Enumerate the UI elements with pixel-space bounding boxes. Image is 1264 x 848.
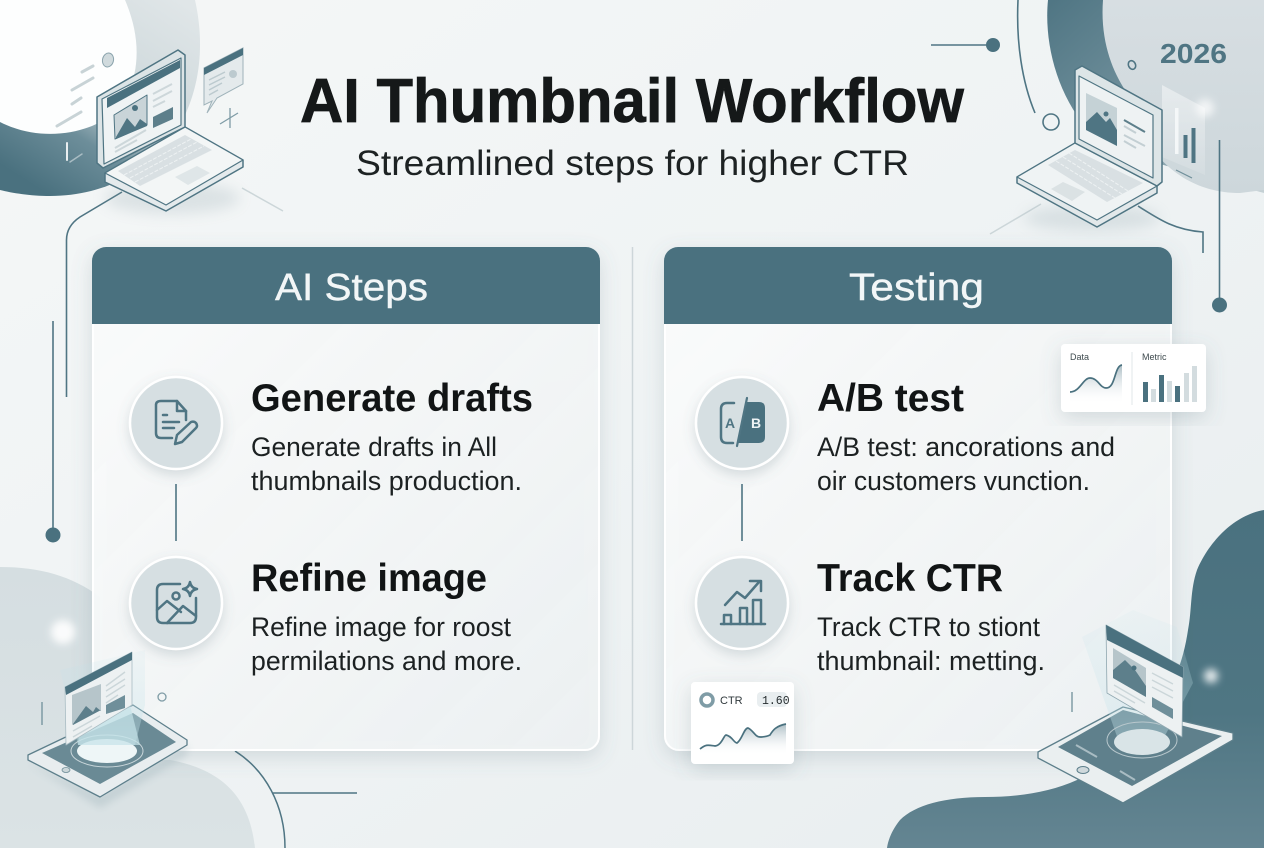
illustration: top-right laptop xyxy=(1017,66,1162,231)
step text: Refine image: permilations and more. xyxy=(251,646,522,676)
decorative shape: top-left crescent xyxy=(0,0,200,196)
panel header: AI Steps xyxy=(92,247,600,324)
panel: Testing xyxy=(664,247,1172,750)
step icon: A/B split: A xyxy=(725,415,735,431)
connector lines: top right xyxy=(931,0,1227,312)
faint ground lines xyxy=(242,188,1041,234)
step text: A/B test: oir customers vunction. xyxy=(817,466,1090,496)
step text: Refine image xyxy=(251,557,522,676)
connector: steps 1 to 2 xyxy=(175,484,177,541)
step text: A/B test: A/B test: ancorations and xyxy=(817,432,1115,462)
step text: Generate drafts: Generate drafts in All xyxy=(251,432,497,462)
step text: Track CTR: thumbnail: metting. xyxy=(817,646,1045,676)
title: AI Thumbnail Workflow xyxy=(300,67,965,136)
center divider xyxy=(632,247,634,750)
card: CTR mini chart: 1.60 xyxy=(762,695,790,708)
step text: Track CTR xyxy=(817,557,1045,676)
connector lines: left side xyxy=(46,192,122,542)
step text: Generate drafts xyxy=(251,377,533,496)
heading: AI Steps: AI Steps xyxy=(275,267,428,309)
step icon: rising bar chart xyxy=(696,557,788,649)
step icon: A/B split xyxy=(696,377,788,469)
step text: Refine image: Refine image xyxy=(251,557,487,600)
step text: Track CTR: Track CTR xyxy=(817,557,1003,600)
subtitle: Streamlined steps for higher CTR xyxy=(356,144,909,183)
card: CTR mini chart: CTR xyxy=(720,695,743,707)
decorative shape: top-right crescent and disc xyxy=(1047,0,1264,193)
card: CTR mini chart xyxy=(691,682,794,764)
illustration: top-left floating window xyxy=(204,48,243,128)
illustration: top-right glass chart xyxy=(1162,85,1214,178)
card: data and metric mini charts: Metric xyxy=(1142,352,1167,362)
card: data and metric mini charts xyxy=(1061,344,1206,412)
connector lines: bottom left arcs xyxy=(235,751,357,848)
illustration: bottom-left tablet xyxy=(28,620,187,808)
heading: Testing: Testing xyxy=(849,267,984,309)
illustration: top-left laptop xyxy=(97,50,243,214)
year label: 2026 xyxy=(1160,38,1227,69)
step text: Generate drafts: thumbnails production. xyxy=(251,466,522,496)
step text: Generate drafts: Generate drafts xyxy=(251,377,533,420)
step icon: A/B split: B xyxy=(751,415,761,431)
connector: steps 3 to 4 xyxy=(741,484,743,541)
step text: Refine image: Refine image for roost xyxy=(251,612,511,642)
step icon: document with pencil xyxy=(130,377,222,469)
decorative shape: bottom-right blob xyxy=(887,510,1264,848)
panel header: Testing xyxy=(664,247,1172,324)
card: data and metric mini charts: Data xyxy=(1070,352,1089,362)
step text: A/B test: A/B test xyxy=(817,377,964,420)
step icon: image with sparkle xyxy=(130,557,222,649)
step text: A/B test xyxy=(817,377,1115,496)
decorative marks: top-left xyxy=(57,52,115,162)
panel: AI Steps xyxy=(92,247,600,750)
step text: Track CTR: Track CTR to stiont xyxy=(817,612,1040,642)
decorative shape: bottom-left blob xyxy=(0,567,255,848)
illustration: bottom-right tablet xyxy=(1038,610,1233,803)
